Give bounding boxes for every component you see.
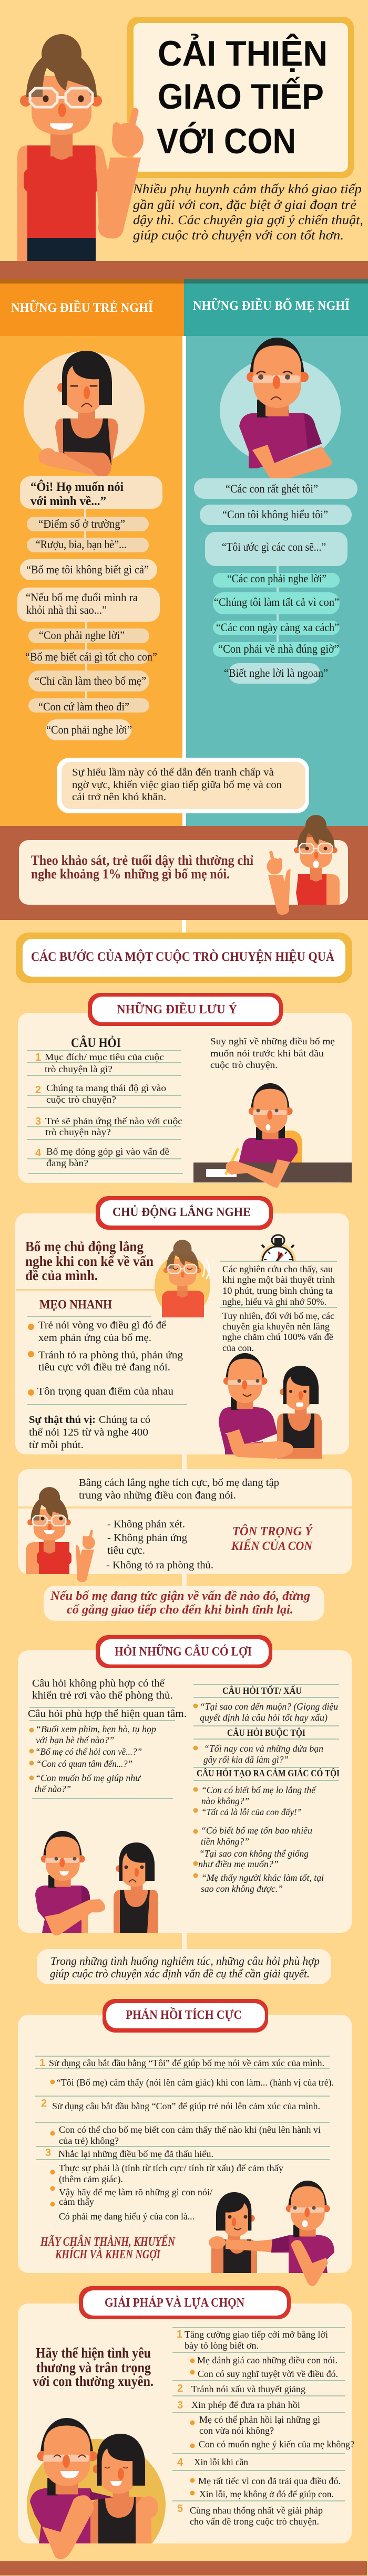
section heading pill — [96, 1196, 273, 1230]
intro text: dậy thì. Các chuyên gia gợi ý chiến thuật, — [133, 213, 363, 227]
fun fact: từ mỗi phút. — [29, 1439, 84, 1451]
steps heading frame — [16, 933, 352, 983]
illustration: mother writing at desk — [193, 1083, 352, 1188]
fun fact — [29, 1414, 150, 1451]
research text: của con. — [222, 1343, 254, 1353]
illustration: mother and daughter talking — [219, 1353, 322, 1459]
question list: trò chuyện này? — [45, 1127, 111, 1137]
title: CẢI THIỆN — [158, 33, 328, 74]
solutions list: Xin lỗi khi cần — [194, 2457, 248, 2467]
question list — [27, 1035, 183, 1174]
teen thoughts list: “Bố mẹ biết cái gì tốt cho con” — [25, 650, 157, 663]
planning note: muốn nói trước khi bắt đầu — [210, 1048, 324, 1059]
section heading pill: HỎI NHỮNG CÂU CÓ LỢI — [115, 1645, 252, 1659]
heading: parents: NHỮNG ĐIỀU BỐ MẸ NGHĨ — [193, 298, 350, 313]
feedback list: Nhắc lại những điều bố mẹ đã thấu hiểu. — [58, 2149, 213, 2159]
solutions list: 1 — [177, 2329, 182, 2340]
intro text: gần gũi với con, đặc biệt ở giai đoạn trẻ — [133, 198, 356, 212]
solutions list: con vừa nói không? — [199, 2425, 274, 2436]
feedback list: Có phải mẹ đang hiểu ý của con là... — [59, 2211, 195, 2222]
parent thoughts list: “Các con rất ghét tôi” — [226, 482, 318, 495]
feedback list: (thêm cảm giác). — [59, 2174, 123, 2185]
encouragement slogan — [40, 2235, 176, 2261]
left question column: Câu hỏi không phù hợp có thể — [32, 1678, 165, 1689]
title: GIAO TIẾP — [158, 76, 324, 117]
footer band — [0, 2561, 367, 2575]
respect slogan: KIẾN CỦA CON — [231, 1539, 313, 1553]
teen thoughts list: “Ôi! Họ muốn nói — [30, 480, 124, 494]
left question column: Câu hỏi phù hợp thể hiện quan tâm. — [28, 1708, 187, 1720]
right question column: “Mẹ thấy người khác làm tốt, tại — [201, 1872, 324, 1883]
fun fact: Chúng ta có — [99, 1414, 150, 1426]
do-not list: - Không phản ứng — [107, 1532, 187, 1544]
title: VỚI CON — [157, 121, 296, 161]
research text: chuyên gia khuyên nên lắng — [222, 1321, 330, 1332]
section heading pill: CHỦ ĐỘNG LẮNG NGHE — [113, 1205, 251, 1219]
title frame — [127, 17, 354, 178]
parent thoughts list: “Biết nghe lời là ngoan” — [224, 666, 328, 679]
quick tips — [27, 1298, 187, 1405]
feedback list: của trẻ) không? — [59, 2135, 119, 2146]
question list: Mục đích/ mục tiêu của cuộc — [45, 1052, 164, 1062]
feedback list: Thực sự phải là (tính từ tích cực/ tính từ xấu) để cảm thấy — [59, 2163, 283, 2174]
survey text — [31, 853, 253, 882]
solutions list: Xin lỗi, mẹ không ở đó để giúp con. — [199, 2489, 334, 2499]
question list: cuộc trò chuyện? — [46, 1094, 116, 1105]
callout: anger warning — [44, 1586, 324, 1621]
lead statement: đề của mình. — [25, 1268, 98, 1283]
illustration: girl with crossed arms — [24, 351, 145, 477]
right question column: “Tại sao con không thể giống — [199, 1848, 309, 1859]
question list: Chúng ta mang thái độ gì vào — [46, 1083, 166, 1093]
misunderstanding callout: Sự hiểu lầm này có thể dẫn đến tranh chấp và — [72, 767, 274, 778]
solutions list — [172, 2328, 354, 2527]
quick tips: MẸO NHANH — [39, 1298, 112, 1312]
illustration: surprised woman pointing — [267, 815, 340, 915]
right question column: CÂU HỎI TỐT/ XẤU — [222, 1685, 302, 1696]
feedback list: Sử dụng câu bắt đầu bằng “Con” để giúp trẻ nói lên cảm xúc của mình. — [52, 2101, 320, 2111]
research text: nghe, hiểu và ghi nhớ 50%. — [222, 1296, 326, 1307]
do-not list — [106, 1519, 213, 1571]
research text: khi nghe một bài thuyết trình — [222, 1274, 335, 1285]
illustration: mother asking daughter — [35, 1831, 158, 1935]
do-not list: - Không phán xét. — [107, 1519, 185, 1530]
planning note: cuộc trò chuyện. — [210, 1060, 278, 1070]
right question column: gây rối kia đã làm gì?” — [203, 1754, 289, 1765]
solutions list: Tránh nói xấu và thuyết giảng — [191, 2384, 305, 2394]
parent thoughts list: “Tôi ước gì các con sẽ...” — [222, 540, 326, 553]
research text: nghe chăm chú 100% vấn đề — [222, 1332, 333, 1342]
survey band — [0, 815, 368, 920]
right question column: tiền không?” — [201, 1836, 249, 1847]
left question column: “Buổi xem phim, hẹn hò, tụ họp — [36, 1724, 156, 1734]
question list: CÂU HỎI — [71, 1035, 121, 1050]
question list: trò chuyện là gì? — [45, 1064, 113, 1074]
listening description: Bằng cách lắng nghe tích cực, bố mẹ đang tập — [79, 1477, 279, 1489]
encouragement slogan: HÃY CHÂN THÀNH, KHUYẾN — [40, 2235, 176, 2249]
planning note — [210, 1036, 335, 1070]
teen thoughts list: “Bố mẹ tôi không biết gì cả” — [26, 563, 149, 576]
teen thoughts list: “Con cứ làm theo đi” — [38, 700, 129, 713]
illustration: woman with glasses pointing at title — [17, 34, 144, 261]
solutions list: bày tỏ lòng biết ơn. — [185, 2340, 259, 2351]
research text — [220, 1261, 337, 1353]
feedback list: Sử dụng câu bắt đầu bằng “Tôi” để giúp bố mẹ nói về cảm xúc của mình. — [49, 2058, 324, 2068]
solutions list: 2 — [177, 2383, 183, 2394]
right question column: “Tối nay con và những đứa bạn — [204, 1743, 323, 1754]
solutions list: Mẹ đánh giá cao những điều con nói. — [197, 2355, 338, 2365]
right question column: như điều mẹ muốn?” — [198, 1859, 279, 1869]
section heading pill: NHỮNG ĐIỀU LƯU Ý — [117, 1002, 237, 1017]
misunderstanding callout — [57, 758, 309, 813]
connector — [182, 1454, 187, 1469]
survey text: nghe khoảng 1% những gì bố mẹ nói. — [31, 866, 230, 882]
right question column: CÂU HỎI TẠO RA CẢM GIÁC CÓ TỘI — [197, 1767, 340, 1778]
feedback list: “Tôi (Bố mẹ) cảm thấy (nói lên cảm giác) khi con làm... (hành vị của trẻ). — [57, 2077, 334, 2088]
panel: things to note — [18, 993, 352, 1188]
misunderstanding callout: cái trở nên khó khăn. — [72, 791, 166, 803]
research text: Các nghiên cứu cho thấy, sau — [222, 1264, 333, 1274]
feedback list: 2 — [41, 2098, 47, 2109]
question list: 4 — [35, 1147, 42, 1159]
lead statement: nghe khi con kể về vấn — [25, 1253, 154, 1269]
callout: serious situations — [37, 1949, 331, 1984]
teen thoughts list — [17, 476, 162, 740]
feedback list: Con có thể cho bố mẹ biết con cảm thấy thế nào khi (nêu lên hành vi — [59, 2124, 321, 2135]
section heading pill: PHẢN HỒI TÍCH CỰC — [126, 2008, 242, 2022]
solutions list: 5 — [177, 2503, 183, 2515]
solutions list: Tăng cường giao tiếp cởi mở bằng lời — [185, 2329, 328, 2340]
parent thoughts list: “Con tôi không hiểu tôi” — [222, 508, 328, 521]
right question column — [193, 1684, 340, 1894]
illustration: mother and daughter embracing — [27, 2418, 166, 2570]
fun fact: thể nói 125 từ và nghe 400 — [29, 1427, 148, 1438]
listening description: trung vào những điều con đang nói. — [79, 1490, 236, 1501]
connector — [182, 1933, 187, 1949]
feedback list — [35, 2056, 334, 2222]
teen thoughts list: “Chỉ cần làm theo bố mẹ” — [35, 674, 146, 687]
callout: anger warning: Nếu bố mẹ đang tức giận về vấn đề nào đó, đừng — [50, 1589, 310, 1603]
right question column: quyết định là câu hỏi tốt hay xấu) — [200, 1712, 328, 1723]
panel: active listening — [15, 1196, 349, 1459]
left question column: “Con muốn bố mẹ giúp như — [35, 1773, 141, 1783]
comparison section: teens versus parents — [0, 261, 368, 826]
steps heading frame: CÁC BƯỚC CỦA MỘT CUỘC TRÒ CHUYỆN HIỆU QUẢ — [31, 949, 334, 964]
intro text: Nhiều phụ huynh cảm thấy khó giao tiếp — [132, 182, 362, 196]
title — [157, 33, 328, 161]
left question column: khiến trẻ rơi vào thế phòng thủ. — [32, 1690, 173, 1701]
illustration: woman listening — [155, 1240, 210, 1317]
research text: 10 phút, trung bình chúng ta — [222, 1285, 333, 1296]
parent thoughts list: “Các con ngày càng xa cách” — [216, 621, 339, 634]
question list: 1 — [35, 1052, 41, 1063]
parent thoughts list — [194, 478, 357, 684]
section heading pill — [103, 1999, 268, 2033]
do-not list: tiêu cực. — [107, 1545, 145, 1556]
right question column: nào không?” — [201, 1796, 249, 1806]
intro text — [132, 182, 363, 243]
respect slogan — [231, 1524, 313, 1553]
parent thoughts list: “Chúng tôi làm tất cả vì con” — [214, 595, 339, 609]
teen thoughts list: khỏi nhà thì sao...” — [26, 603, 107, 616]
callout: serious situations: giúp cuộc trò chuyện xác định vấn đề cụ thể cần giải quyết. — [50, 1967, 310, 1980]
right question column: “Có biết bố mẹ tốn bao nhiêu — [201, 1825, 312, 1836]
question list: Trẻ sẽ phản ứng thế nào với cuộc — [45, 1116, 182, 1126]
misunderstanding callout: ngờ vực, khiến việc giao tiếp giữa bố mẹ và con — [72, 779, 282, 791]
feedback list: cảm thấy — [59, 2196, 94, 2207]
illustration: worried mother with crossed arms — [220, 338, 341, 481]
teen thoughts list: với mình về...” — [30, 495, 106, 508]
quick tips: Trẻ nói vòng vo điều gì đó để — [38, 1320, 166, 1331]
panel: respect child's opinion — [18, 1469, 352, 1582]
solutions list: 3 — [177, 2400, 183, 2411]
hand over frame — [95, 111, 144, 238]
planning note: Suy nghĩ về những điều bố mẹ — [210, 1036, 335, 1046]
connector — [182, 1574, 187, 1586]
feedback list: 3 — [45, 2147, 51, 2159]
question list: đang bàn? — [46, 1158, 88, 1168]
section heading pill — [79, 2286, 291, 2319]
quick tips: xem phản ứng của bố mẹ. — [38, 1332, 151, 1344]
parent thoughts list: “Các con phải nghe lời” — [227, 572, 326, 585]
callout: serious situations: Trong những tình huống nghiêm túc, những câu hỏi phù hợp — [50, 1954, 320, 1967]
solutions list: 4 — [177, 2457, 183, 2468]
teen thoughts list: “Điểm số ở trường” — [38, 517, 125, 530]
lead statement: Bố mẹ chủ động lắng — [25, 1239, 144, 1254]
teen thoughts list: “Con phải nghe lời” — [39, 629, 125, 642]
question list: 3 — [35, 1116, 41, 1127]
solutions list: Con có suy nghĩ tuyệt vời về điều đó. — [198, 2369, 338, 2379]
solutions list: Mẹ rất tiếc vì con đã trải qua điều đó. — [198, 2476, 341, 2486]
solutions list: Mẹ có thể phản hồi lại những gì — [199, 2414, 320, 2425]
right question column: sao con không được.” — [201, 1883, 283, 1894]
right question column: “Tại sao con đến muộn? (Giọng điệu — [200, 1701, 338, 1712]
illustration: smiling woman thumbs up — [26, 1487, 95, 1582]
illustration: mother with hand on daughter's shoulder — [209, 2181, 334, 2286]
panel: solutions and choices — [18, 2286, 354, 2570]
research text: Tuy nhiên, đối với bố mẹ, các — [222, 1311, 334, 1321]
solutions list: Cùng nhau thống nhất về giải pháp — [190, 2505, 323, 2516]
encouragement slogan: KHÍCH VÀ KHEN NGỢI — [55, 2248, 161, 2261]
parent thoughts list: “Con phải về nhà đúng giờ” — [218, 642, 339, 655]
feedback list: 1 — [39, 2057, 45, 2069]
question list: Bố mẹ đóng góp gì vào vấn đề — [46, 1146, 169, 1157]
left question column: “Bố mẹ có thể hỏi con về...?” — [35, 1746, 142, 1757]
header section — [17, 17, 363, 261]
left question column: thế nào?” — [35, 1784, 71, 1794]
question list: 2 — [35, 1084, 41, 1096]
right question column: “Tất cả là lỗi của con đấy!” — [201, 1807, 302, 1817]
panel: positive feedback — [18, 1999, 352, 2286]
solutions list: Xin phép để đưa ra phản hồi — [191, 2400, 300, 2410]
teen thoughts list: “Nếu bố mẹ đuổi mình ra — [26, 591, 138, 604]
listening description — [79, 1477, 279, 1501]
quick tips: tiêu cực với điều trẻ đang nói. — [38, 1362, 170, 1373]
intro text: giúp cuộc trò chuyện với con tốt hơn. — [133, 228, 344, 243]
love statement: thương và trân trọng — [36, 2360, 151, 2375]
icon: stopwatch — [260, 1234, 296, 1261]
callout: anger warning: cố gắng giao tiếp cho đến khi bình tĩnh lại. — [67, 1603, 293, 1617]
teen thoughts list: “Rượu, bia, bạn bè”... — [36, 538, 127, 551]
section heading pill — [96, 1635, 272, 1668]
left question column: “Con có quan tâm đến...?” — [36, 1758, 132, 1769]
quick tips: Tránh tỏ ra phòng thủ, phản ứng — [38, 1349, 183, 1361]
right question column: CÂU HỎI BUỘC TỘI — [227, 1727, 305, 1738]
respect slogan: TÔN TRỌNG Ý — [232, 1524, 313, 1538]
left question column: với bạn bè thế nào?” — [36, 1735, 114, 1745]
love statement: Hãy thể hiện tình yêu — [36, 2345, 151, 2361]
do-not list: - Không tỏ ra phòng thủ. — [106, 1559, 213, 1571]
survey text: Theo khảo sát, trẻ tuổi dậy thì thường chỉ — [31, 853, 253, 868]
right question column: “Con có biết bố mẹ lo lắng thế — [201, 1785, 317, 1795]
teen thoughts list: “Con phải nghe lời” — [46, 723, 132, 736]
panel: useful questions — [18, 1635, 352, 1935]
quick tips: Tôn trọng quan điểm của nhau — [37, 1386, 173, 1397]
section heading pill — [88, 993, 283, 1026]
left question column — [28, 1678, 187, 1798]
connector — [182, 920, 186, 933]
fun fact: Sự thật thú vị: — [29, 1414, 96, 1426]
lead statement — [25, 1239, 154, 1283]
solutions list: cho vấn đề trong cuộc trò chuyện. — [190, 2516, 319, 2527]
solutions list: Con có muốn nghe ý kiến của mẹ không? — [199, 2439, 354, 2449]
section heading pill: GIẢI PHÁP VÀ LỰA CHỌN — [105, 2296, 245, 2310]
heading: teens: NHỮNG ĐIỀU TRẺ NGHĨ — [11, 300, 153, 315]
love statement: với con thường xuyên. — [33, 2373, 154, 2389]
love statement — [33, 2345, 154, 2389]
feedback list: Vậy hãy để mẹ làm rõ những gì con nói/ — [59, 2187, 212, 2197]
